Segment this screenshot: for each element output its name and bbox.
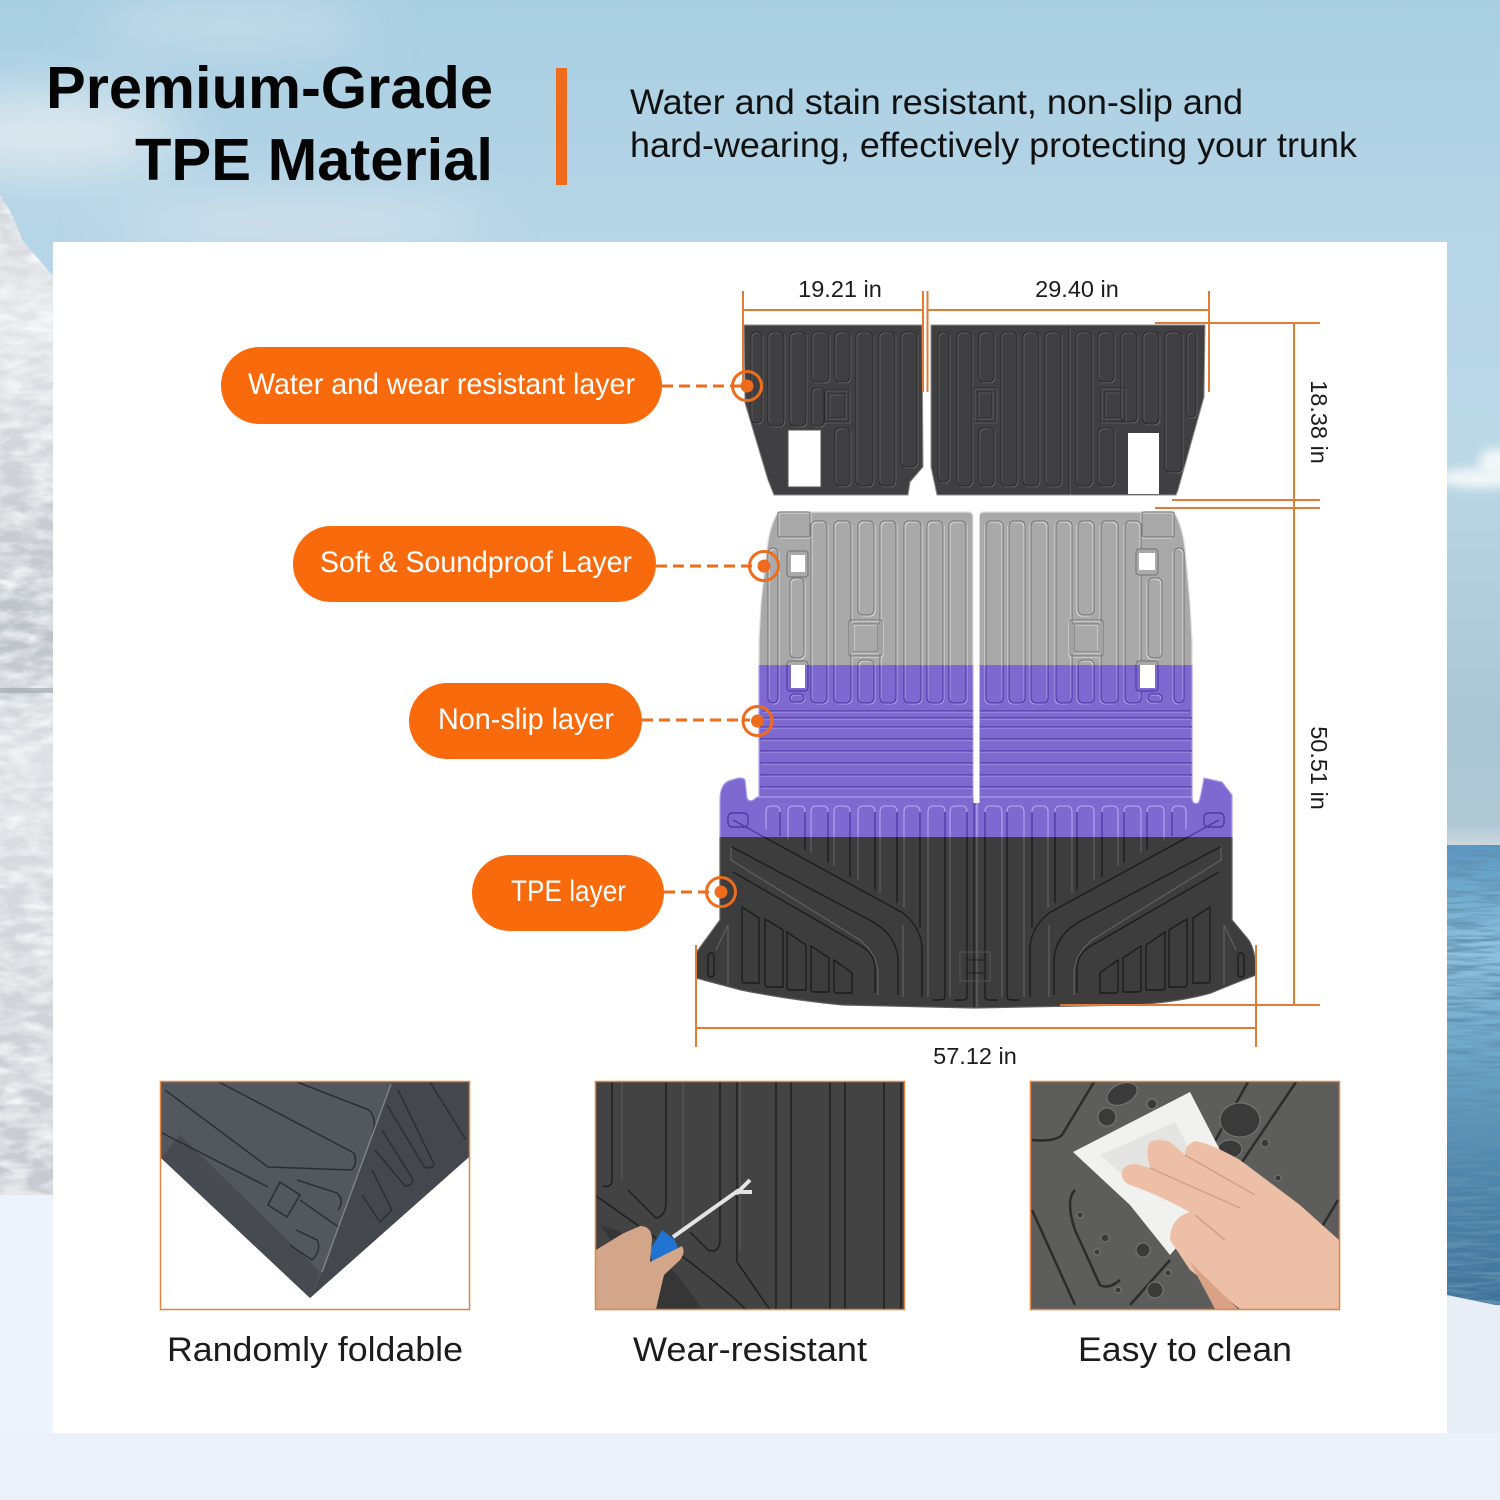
callout: water and wear resistant layer: Water and wear resistant layer bbox=[248, 368, 635, 401]
mat: upper right seatback bbox=[931, 325, 1205, 495]
callout: TPE layer: TPE layer bbox=[511, 875, 626, 908]
dimension labels: 18.38 in bbox=[1306, 380, 1332, 464]
dimension labels: 19.21 in bbox=[798, 276, 882, 302]
orange title divider bbox=[556, 68, 567, 185]
subtitle bbox=[630, 83, 1357, 165]
caption: wear-resistant: Wear-resistant bbox=[633, 1331, 868, 1369]
photo: easy to clean bbox=[1030, 1078, 1340, 1310]
callout: soft and soundproof layer: Soft & Soundproof Layer bbox=[320, 546, 632, 579]
mat: middle folding section left bbox=[759, 512, 974, 800]
centre gap between the middle mats bbox=[974, 512, 980, 803]
dimension lines bbox=[696, 291, 1320, 1047]
title: TPE Material bbox=[135, 127, 493, 193]
photo: wear-resistant bbox=[596, 1082, 904, 1310]
subtitle: hard-wearing, effectively protecting your trunk bbox=[630, 126, 1357, 165]
caption: randomly foldable: Randomly foldable bbox=[167, 1331, 463, 1369]
mat: upper left seatback bbox=[744, 325, 923, 495]
mat: middle folding section right bbox=[978, 512, 1192, 800]
title: Premium-Grade bbox=[46, 55, 493, 121]
callout: non-slip layer: Non-slip layer bbox=[438, 703, 614, 736]
callout: TPE layer bbox=[472, 855, 736, 931]
callout: water and wear resistant layer bbox=[221, 347, 762, 424]
subtitle: Water and stain resistant, non-slip and bbox=[630, 83, 1243, 122]
water droplets bbox=[1077, 1078, 1281, 1298]
photo: randomly foldable bbox=[160, 1082, 470, 1310]
icon: pry tool bbox=[650, 1180, 752, 1262]
title bbox=[46, 55, 493, 193]
dimension labels: 57.12 in bbox=[933, 1043, 1017, 1069]
diagram: trunk mats bbox=[696, 325, 1256, 1008]
dimension labels bbox=[798, 276, 1332, 1069]
wiping hand bbox=[1122, 1140, 1339, 1309]
hand holding the tool bbox=[596, 1226, 684, 1309]
callout: non-slip layer bbox=[409, 683, 772, 759]
callout: soft and soundproof layer bbox=[293, 526, 778, 602]
paper towel bbox=[1073, 1092, 1221, 1255]
caption: easy to clean: Easy to clean bbox=[1078, 1331, 1292, 1369]
white panel bbox=[53, 242, 1447, 1433]
dimension labels: 50.51 in bbox=[1306, 726, 1332, 810]
mat: cargo floor section bbox=[696, 778, 1256, 1008]
dimension labels: 29.40 in bbox=[1035, 276, 1119, 302]
